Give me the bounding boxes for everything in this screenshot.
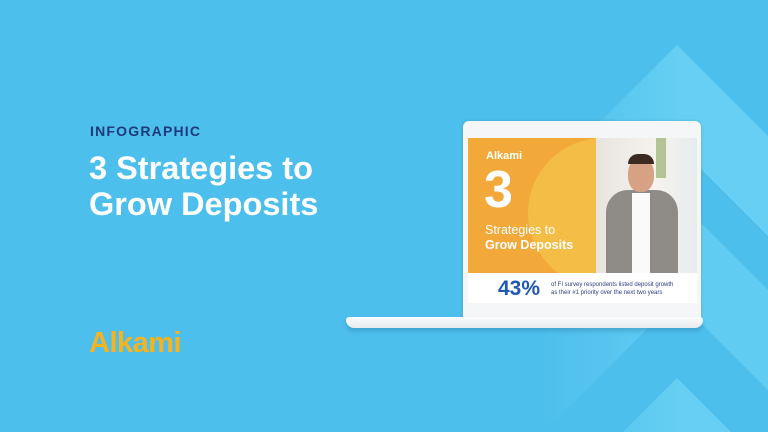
label: INFOGRAPHIC: INFOGRAPHIC [90, 123, 201, 139]
title: Grow Deposits [89, 186, 318, 222]
cover title: Grow Deposits [485, 238, 573, 252]
cover title: Strategies to [485, 223, 555, 237]
laptop screen [463, 121, 701, 318]
photo: businessman [596, 138, 697, 273]
cover title [485, 223, 573, 252]
orange cover panel [468, 138, 596, 273]
stat: 43%: of FI survey respondents listed deposit growth [551, 282, 673, 288]
laptop [345, 120, 704, 332]
stat: 43%: as their #1 priority over the next two years [551, 290, 662, 296]
title [89, 150, 318, 222]
laptop base [346, 317, 703, 328]
title: 3 Strategies to [89, 150, 313, 186]
cover logo: Alkami [486, 150, 522, 162]
stat: 43% [468, 273, 697, 303]
logo: Alkami: Alkami [89, 327, 181, 359]
stat: 43%: 43% [498, 277, 540, 300]
cover number: 3 [484, 161, 513, 219]
